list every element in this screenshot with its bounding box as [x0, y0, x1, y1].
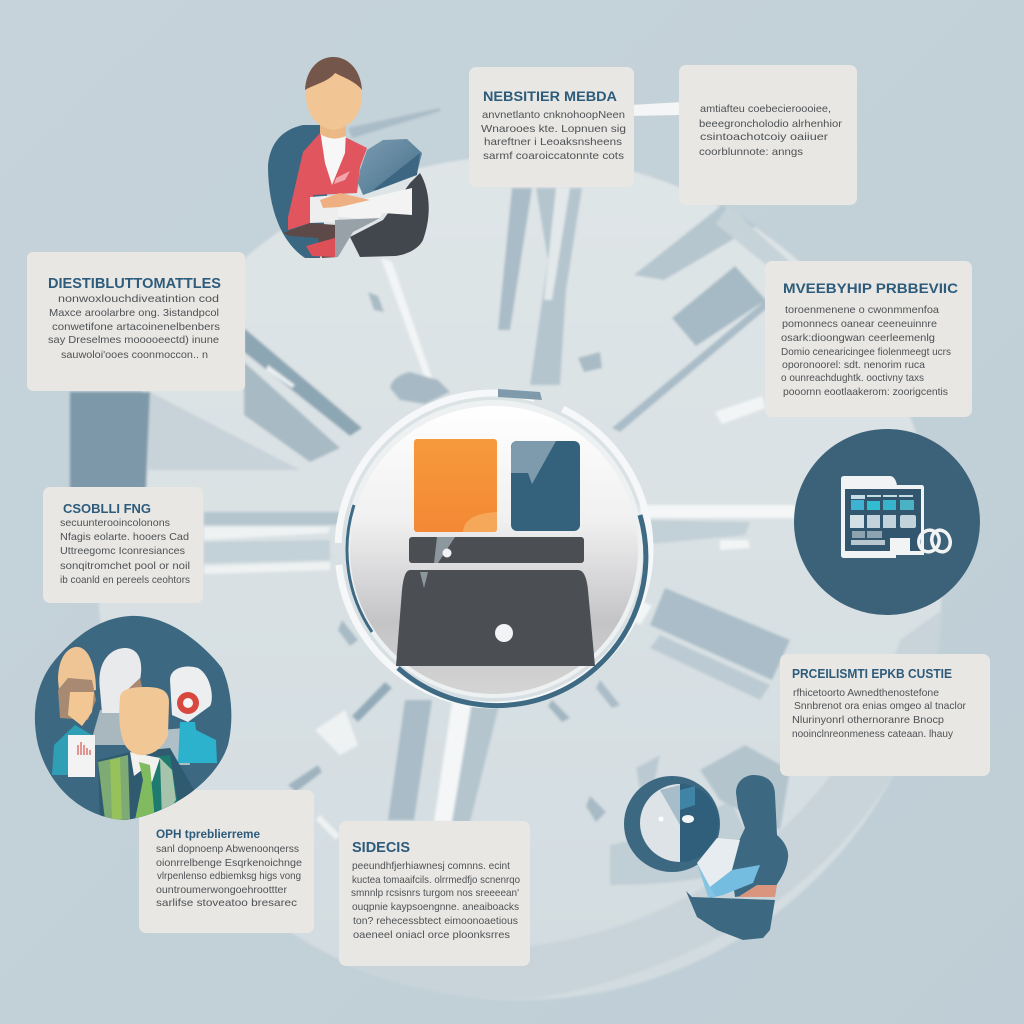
panel: sidecis: [339, 821, 530, 966]
panel body text: oionrrelbenge Esqrkenoichnge: [156, 857, 302, 869]
icon: dashboard tablet circle: [794, 429, 980, 615]
panel heading: DIESTIBLUTTOMATTLES: [48, 276, 221, 292]
panel body text: nonwoxlouchdiveatintion cod: [58, 293, 219, 305]
emblem: navy tile: [511, 441, 580, 531]
note body text: coorblunnote: anngs: [699, 146, 803, 158]
panel body text: o ounreachdughtk. ooctivny taxs: [781, 372, 924, 384]
emblem: device bar: [409, 537, 584, 563]
panel body text: secuunterooincolonons: [60, 517, 170, 529]
panel body text: Uttreegomc Iconresiances: [60, 545, 185, 557]
panel body text: Maxce aroolarbre ong. 3istandpcol: [49, 307, 219, 319]
panel body text: nooinclnreonmeness cateaan. lhauy: [792, 728, 954, 740]
panel body text: anvnetlanto cnknohoopNeen: [482, 109, 625, 121]
person: head and hair: [305, 57, 362, 139]
basket: [686, 891, 775, 940]
panel heading: OPH tpreblierreme: [156, 829, 260, 841]
panel body text: peeundhfjerhiawnesj comnns. ecint: [352, 860, 510, 872]
illustration: team in circle: [35, 616, 231, 825]
panel body text: [351, 860, 520, 941]
note body text: amtiafteu coebecieroooiee,: [700, 103, 831, 115]
person: blue backdrop: [268, 125, 330, 258]
panel body text: ountroumerwongoehroottter: [156, 884, 287, 896]
panel heading: MVEEBYHIP PRBBEVIIC: [783, 281, 958, 296]
panel body text: [48, 293, 220, 361]
panel body text: [792, 687, 966, 740]
panel body text: conwetifone artacoinenelbenbers: [52, 321, 220, 333]
panel: marketing preview: [765, 261, 972, 417]
panel body text: smnnlp rcsisnrs turgom nos sreeeean': [351, 887, 519, 899]
panel body text: toroenmenene o cwonmmenfoa: [785, 304, 939, 316]
panel body text: sanl dopnoenp Abwenoonqerss: [156, 843, 299, 855]
panel body text: sarlifse stoveatoo bresarec: [156, 897, 297, 909]
emblem: orange tile: [414, 439, 497, 532]
white tab and chain links: [890, 527, 953, 555]
panel heading: NEBSITIER MEBDA: [483, 89, 617, 104]
person: dark shoulder: [350, 173, 429, 257]
illustration: person holding a helmet: [268, 57, 429, 258]
panel body text: ton? rehecessbtect eimoonoaetious: [353, 915, 518, 927]
panel: distribution: [27, 252, 245, 391]
panel body text: osark:dioongwan ceerleemenlg: [781, 332, 935, 344]
team: backdrop: [35, 616, 231, 820]
background: central disc with radial shards: [70, 108, 942, 1000]
panel body text: oaeneel oniacl orce ploonksrres: [353, 929, 510, 941]
reader silhouette: [730, 775, 788, 897]
note body text: [699, 103, 843, 158]
central emblem: [338, 389, 650, 706]
panel: newsletter media: [469, 67, 682, 187]
team: woman right: [158, 666, 217, 765]
panel heading: CSOBLLI FNG: [63, 501, 151, 516]
panel body text: say Dreselmes mooooeectd) inune: [48, 334, 219, 346]
panel body text: sonqitromchet pool or noil: [60, 560, 190, 572]
panel body text: Nfagis eolarte. hooers Cad: [60, 531, 189, 543]
panel: upper right note: [679, 65, 857, 205]
panel body text: kuctea tomaaifcils. olrrmedfjo scnenrqo: [352, 874, 520, 886]
panel body text: [60, 517, 190, 586]
panel body text: [781, 304, 951, 398]
panel body text: Nlurinyonrl othernoranre Bnocp: [792, 714, 944, 726]
note body text: beeegroncholodio alrhenhior: [699, 118, 843, 130]
panel body text: [481, 109, 626, 162]
panel body text: pomonnecs oanear ceeneuinnre: [782, 318, 937, 330]
panel heading: SIDECIS: [352, 840, 410, 856]
team: man front: [98, 687, 197, 825]
team: man middle: [90, 648, 145, 745]
tablet screen: [845, 489, 921, 551]
panel body text: Wnarooes kte. Lopnuen sig: [481, 123, 626, 135]
illustration: magnifier and reader: [624, 775, 788, 940]
panel body text: oporonoorel: sdt. nenorim ruca: [782, 359, 925, 371]
panel body text: pooornn eootlaakerom: zoorigcentis: [783, 386, 948, 398]
emblem: device body: [396, 570, 595, 666]
panel body text: vlrpenlenso edbiemksg higs vong: [157, 870, 301, 882]
panel body text: Snnbrenot ora enias omgeo al tnaclor: [794, 700, 966, 712]
panel body text: sauwoloi'ooes coonmoccon.. n: [61, 349, 208, 361]
panel body text: ouqpnie kaypsoengnne. aneaiboacks: [352, 901, 519, 913]
panel body text: hareftner i Leoaksnsheens: [484, 136, 622, 148]
open book: [697, 838, 777, 898]
tablet outline: [841, 476, 924, 558]
magnifier: [624, 776, 720, 872]
panel heading: PRCEILISMTI EPKB CUSTIE: [792, 666, 952, 681]
note body text: csintoachotcoiy oaiiuer: [700, 131, 829, 143]
panel body text: sarmf coaroiccatonnte cots: [483, 150, 624, 162]
emblem outer ring: [338, 389, 650, 706]
panel: premium price guide: [780, 654, 990, 776]
panel body text: Domio cenearicingee fiolenmeegt ucrs: [781, 346, 951, 358]
emblem sphere: [350, 406, 638, 694]
panel body text: [156, 843, 302, 909]
person: helmet: [358, 139, 422, 195]
panel: open distribution: [139, 790, 314, 933]
panel body text: ib coanld en pereels ceohtors: [60, 574, 190, 586]
panel: consulting: [43, 487, 203, 603]
team: woman left: [52, 647, 96, 777]
person: body: [283, 130, 412, 258]
panel body text: rfhicetoorto Awnedthenostefone: [793, 687, 939, 699]
